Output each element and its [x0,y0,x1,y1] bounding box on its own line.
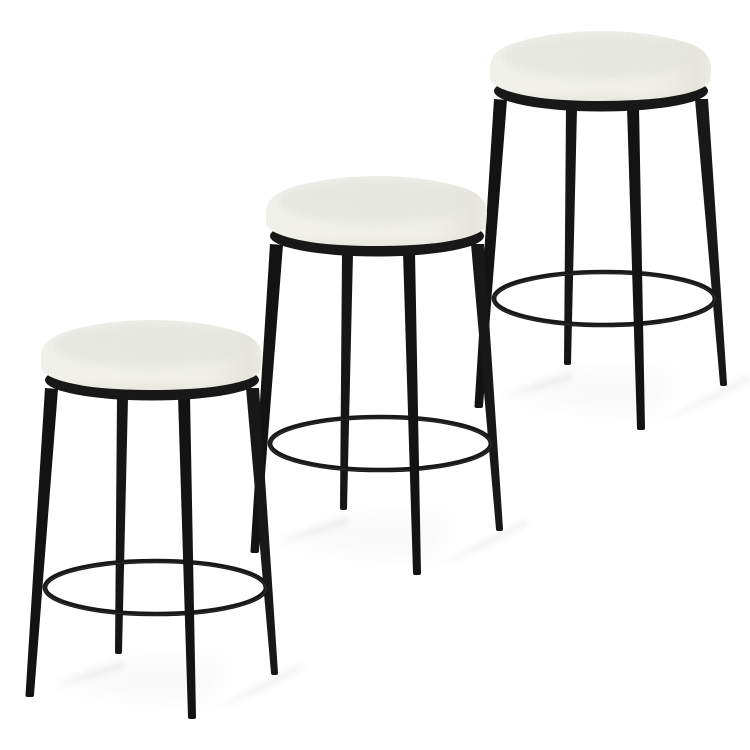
stool: back right [474,31,750,430]
stool: front left [26,320,303,719]
stool: middle [250,176,528,575]
